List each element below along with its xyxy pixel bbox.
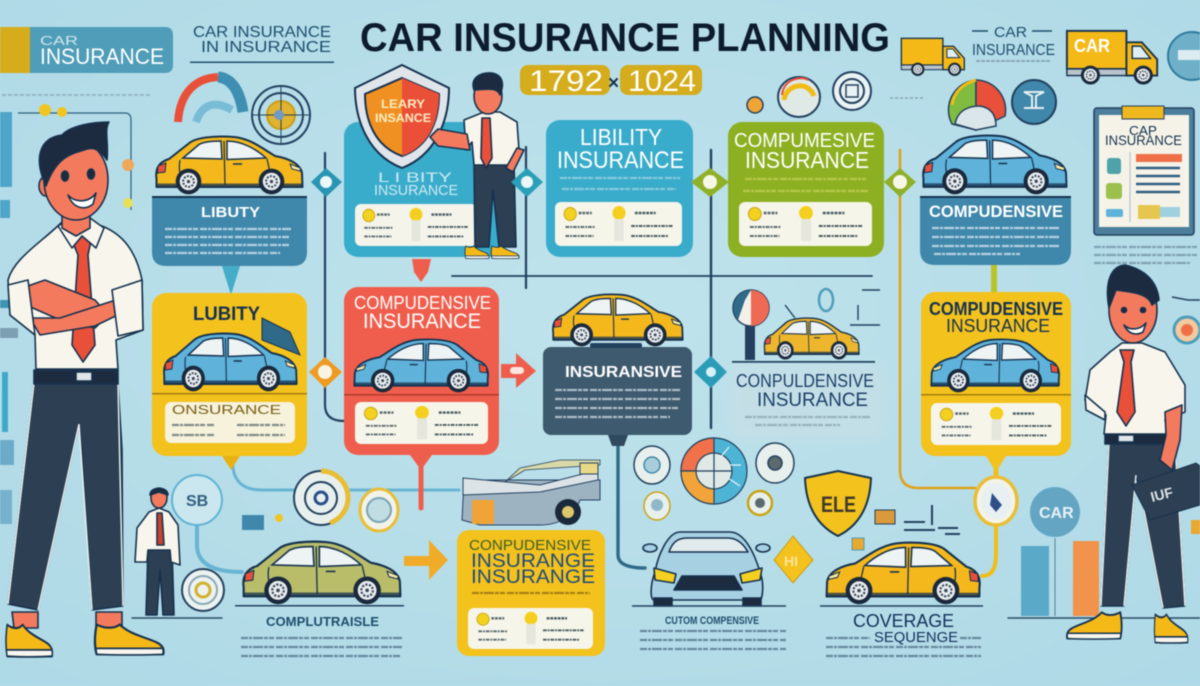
panel: clipboard: INSURANCE (1105, 132, 1182, 148)
panel: comprehensive insurance yellow bottom: INSURANGE (471, 551, 595, 572)
panel: comprehensive insurance yellow bottom: CONPUDENSIVE (469, 537, 591, 554)
panel: comprehensive blue callout (920, 136, 1071, 265)
medallion (975, 477, 1017, 525)
text block: front car caption (640, 631, 786, 649)
car: yellow bottom right (827, 543, 980, 604)
diamond connector: teal 2 (511, 168, 543, 197)
person: centre pointing at shield (430, 73, 524, 259)
panel: comprehensive insurance caption: CONPULDENSIVE (736, 371, 874, 391)
icon: colour gauge (948, 80, 1006, 130)
car: blue damaged (164, 334, 297, 391)
panel: clipboard: CAP (1129, 123, 1157, 138)
baseline under cars (632, 362, 983, 606)
label: text under front car: CUTOM COMPENSIVE (665, 615, 759, 627)
car: blue facing left (931, 339, 1059, 392)
diamond: yellow (774, 536, 813, 583)
icons: small circles around pie (634, 443, 794, 520)
right margin icons (1172, 297, 1200, 534)
person: small standing (135, 488, 180, 615)
arrow: orange right (404, 540, 448, 580)
panel: comprehensive insurance green (728, 122, 884, 257)
icon: left small circles: SB (186, 493, 208, 510)
icon: yellow shield (805, 471, 871, 536)
dimensions badge: 1024 (628, 65, 696, 98)
panel: liability insurance teal 2: INSURANCE (557, 147, 684, 174)
balloon: car (1030, 487, 1080, 616)
text block: olive car caption (241, 638, 402, 656)
truck large with car label: CAR (1074, 36, 1110, 56)
arrow: red down (412, 259, 431, 282)
subtitle: car insurance right: CAR (994, 24, 1027, 41)
label: coverage sequence: COVERAGE (853, 611, 954, 631)
left margin diagram (0, 95, 150, 524)
header tag: car insurance: INSURANCE (40, 44, 164, 69)
panel: comprehensive insurance yellow right: INSURANCE (946, 316, 1050, 336)
icon: shield (355, 65, 449, 168)
truck large with car label (1067, 31, 1157, 85)
diamond: yellow: HI (784, 553, 798, 569)
car: yellow small (764, 318, 859, 360)
label: coverage sequence: SEQUENGE (874, 629, 958, 646)
icon: top right badge (1168, 32, 1200, 80)
header tag: car insurance (0, 27, 173, 73)
diamond connector: green 2 (884, 168, 916, 197)
diamond connector: teal 3 (694, 356, 727, 388)
panel: liability insurance teal: INSURANCE (374, 182, 458, 199)
icon: pie chart (681, 438, 747, 504)
subtitle: car insurance right: INSURANCE (972, 42, 1055, 59)
icon: shield: INSANCE (375, 111, 431, 125)
label: coverage sequence (853, 611, 958, 646)
balloon: car: CAR (1039, 505, 1074, 522)
panel: comprehensive insurance red: COMPUDENSIVE (354, 293, 491, 313)
connector lines (132, 147, 1200, 618)
subtitle: car insurance in insurance (190, 24, 334, 63)
truck small (901, 38, 964, 76)
car: olive (235, 542, 404, 606)
diamond connector: orange (309, 357, 342, 388)
panel: comprehensive insurance yellow bottom: INSURANGE (471, 567, 595, 588)
car: yellow (156, 137, 302, 194)
icons: small badges row (747, 72, 925, 117)
subtitle: car insurance right (972, 24, 1055, 61)
icon: shield: LEARY (381, 97, 425, 111)
dimensions badge: × (608, 73, 619, 94)
icon: red white balloon (733, 290, 769, 360)
panel: comprehensive insurance caption (730, 290, 885, 440)
header tag: car insurance: CAR (40, 33, 78, 48)
label: compultraisle: COMPLUTRAISLE (266, 614, 379, 629)
panel: liability insurance teal (344, 122, 501, 257)
folder held by right person (1132, 463, 1200, 520)
subtitle: car insurance in insurance: CAR INSURANCE (193, 24, 331, 41)
panel: insuransive dark: INSURANSIVE (565, 364, 682, 381)
panel: comprehensive insurance caption: INSURANCE (757, 390, 868, 411)
text block: right column caption (1094, 247, 1198, 263)
panel: liability yellow: LUBITY (193, 304, 260, 325)
panel: comprehensive insurance yellow right (921, 292, 1071, 472)
bar chart (1021, 541, 1099, 616)
title: CAR INSURANCE PLANNING (360, 16, 890, 60)
panel: comprehensive insurance red: INSURANCE (363, 310, 481, 333)
text block: coverage caption (826, 638, 981, 656)
panel: comprehensive insurance red (344, 287, 499, 470)
panel: comprehensive insurance green: INSURANCE (745, 147, 869, 173)
panel: comprehensive blue callout: COMPUDENSIVE (929, 202, 1063, 221)
icon: left small circles (172, 471, 398, 611)
car: blue (923, 136, 1067, 194)
panel: liability blue callout: LIBUTY (201, 204, 260, 221)
car: blue facing left (354, 339, 488, 392)
panel: liability blue callout (152, 137, 307, 295)
arrow: red right (501, 353, 536, 388)
diamond connector: teal 1 (311, 168, 342, 197)
icon: blue badge (1012, 80, 1056, 124)
convertible car (462, 460, 600, 525)
person: right large (1067, 265, 1188, 643)
icon: gauge top left (178, 77, 243, 122)
panel: insuransive dark (543, 343, 692, 446)
folder held by right person: IUF (1149, 484, 1175, 505)
panel: liability insurance teal 2: LIBILITY (580, 124, 662, 150)
panel: liability insurance teal: L I BITY (378, 169, 453, 185)
person: left large (6, 122, 164, 657)
panel: liability yellow: ONSURANCE (172, 402, 281, 417)
icon: target (252, 86, 310, 145)
icon: small diagram (852, 505, 960, 550)
panel: liability insurance teal 2 (546, 120, 693, 257)
panel: liability yellow (152, 293, 307, 470)
panel: comprehensive insurance yellow right: COMPUDENSIVE (929, 299, 1063, 319)
dimensions badge: 1792 (529, 65, 603, 98)
dimensions badge (520, 65, 702, 98)
diamond connector: green 1 (691, 168, 729, 197)
panel: clipboard (1094, 106, 1194, 235)
panel: comprehensive insurance green: COMPUMESIVE (734, 130, 875, 152)
car: front view (643, 532, 770, 606)
icon: yellow shield: ELE (821, 492, 856, 517)
subtitle: car insurance in insurance: IN INSURANCE (201, 39, 331, 56)
icons: scattered small above yellow panel (785, 289, 880, 325)
car: yellow centre (553, 294, 683, 346)
panel: comprehensive insurance yellow bottom (457, 530, 605, 656)
